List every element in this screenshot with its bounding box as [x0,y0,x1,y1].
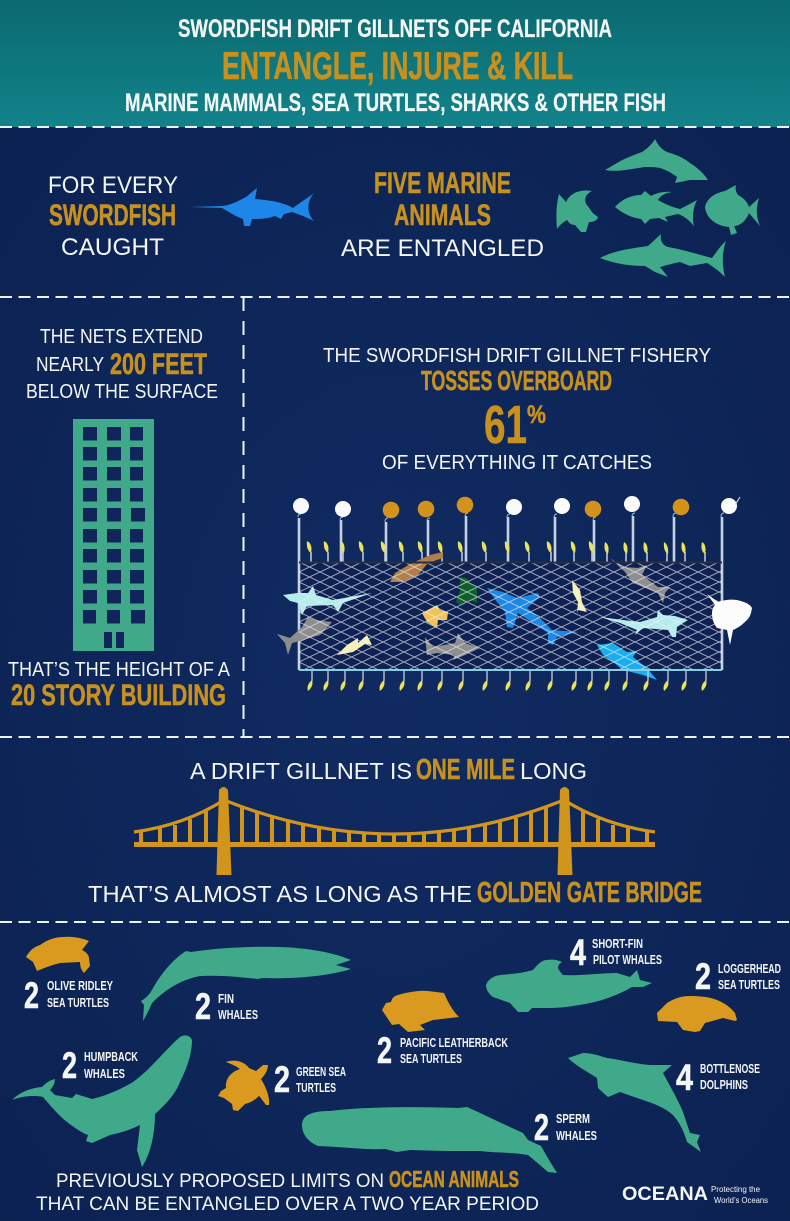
text: tosses overboard 61 percent: OF EVERYTHING IT CATCHES [382,452,652,474]
text: nets extend nearly 200 feet [26,326,218,403]
text: nets extend nearly 200 feet: THE NETS EXTEND [40,326,203,348]
float flag line [735,497,740,505]
fish: pale vertical tuna [572,580,587,613]
animal: humpback whales: HUMPBACK [84,1050,138,1064]
text: height of a 20 story building: THAT’S THE HEIGHT OF A [8,659,231,681]
text: footer caption: PREVIOUSLY PROPOSED LIMITS ON [56,1171,384,1192]
icon: dolphin [605,139,708,183]
text: footer caption: OCEAN ANIMALS [389,1166,519,1192]
net fish [277,552,688,680]
icon: golden gate bridge [134,787,655,875]
animal: green sea turtles: TURTLES [296,1081,336,1095]
bridge deck [134,842,655,847]
text: golden gate bridge comparison [88,877,702,909]
top sticks [311,552,705,562]
text: one mile long: A DRIFT GILLNET IS [190,758,412,784]
icon: turtle [556,190,598,232]
text: nets extend nearly 200 feet: 200 FEET [110,348,207,381]
header title [125,15,666,117]
animal: fin whales: 2 [195,986,211,1027]
text: for every swordfish caught [48,172,178,261]
animal: short-fin pilot whales: SHORT-FIN [592,937,643,951]
icon: sunfish [705,185,760,235]
text: height of a 20 story building: 20 STORY BUILDING [11,679,226,712]
bridge hangers [141,808,647,843]
fish: green turtle [456,577,477,605]
animal: bottlenose dolphins: BOTTLENOSE [700,1062,760,1076]
animal: sperm whales: 2 [534,1107,549,1148]
animal: short-fin pilot whales [486,932,662,1012]
fish: blue shark [487,588,578,645]
animal: olive ridley sea turtles: SEA TURTLES [47,996,109,1010]
animal: loggerhead sea turtles: 2 [695,956,711,997]
bridge towers [216,787,572,875]
text: five marine animals are entangled: ARE ENTANGLED [341,235,544,262]
logo: oceana: Protecting the [711,1185,761,1194]
fish: bright blue shark [597,643,657,680]
bottom sticks [312,671,706,681]
fish: pale tuna [337,635,372,655]
animal: fin whales: FIN [218,992,234,1006]
text: for every swordfish caught: FOR EVERY [48,172,178,199]
bridge cables [134,800,655,834]
fish: aqua shark left [283,586,372,615]
animal: bottlenose dolphins: 4 [676,1057,693,1098]
fish: gray shark right [610,558,670,603]
logo: oceana: OCEANA [622,1184,708,1205]
icons: five marine animals [556,139,760,277]
text: height of a 20 story building [8,659,231,712]
text: tosses overboard 61 percent: TOSSES OVERBOARD [421,365,612,396]
fish: white sunfish [707,594,752,645]
animal: pacific leatherback sea turtles: 2 [377,1030,392,1071]
animal: pacific leatherback sea turtles: SEA TURTLES [400,1052,462,1066]
text: one mile long [190,754,587,786]
floats orange [383,497,689,518]
net bottom line [299,669,722,671]
text: tosses overboard 61 percent: % [527,401,546,429]
animal: green sea turtles: 2 [274,1059,290,1100]
animal: sperm whales: SPERM [556,1112,590,1126]
animal: short-fin pilot whales: PILOT WHALES [593,953,662,967]
animal: short-fin pilot whales: 4 [570,932,586,973]
animal: fin whales [141,947,351,1027]
animal: bottlenose dolphins [568,1053,760,1152]
gillnet illustration [277,496,752,691]
animal: humpback whales: WHALES [84,1067,125,1081]
text: for every swordfish caught: CAUGHT [61,234,164,261]
icon: swordfish [190,188,314,226]
animal: green sea turtles [218,1059,346,1111]
fish: brown ray [390,552,443,582]
floats white [293,496,737,517]
text: five marine animals are entangled [341,167,544,262]
fish: yellow fish [422,605,448,628]
animal: pacific leatherback sea turtles: PACIFIC LEATHERBACK [400,1036,508,1050]
net mesh [299,563,722,670]
fish: gray shark left [277,617,332,655]
icon: 20 story building [73,419,154,651]
text: five marine animals are entangled: FIVE MARINE [374,167,511,200]
animal: olive ridley sea turtles: 2 [24,975,39,1016]
text: five marine animals are entangled: ANIMALS [394,199,491,232]
header title: ENTANGLE, INJURE & KILL [222,45,573,88]
logo: oceana [622,1184,768,1205]
text: one mile long: LONG [520,758,587,784]
logo: oceana: World’s Oceans [714,1196,768,1205]
fish: aqua shark right [600,610,688,637]
animal: humpback whales [12,1035,192,1167]
text: nets extend nearly 200 feet: NEARLY [36,354,104,376]
net poles [299,516,722,670]
top yellow flags [307,541,706,554]
net background [299,562,722,670]
text: footer caption: THAT CAN BE ENTANGLED OVER A TWO YEAR PERIOD [36,1194,539,1215]
icon: tuna [615,191,697,226]
animal: sperm whales [302,1107,597,1173]
text: tosses overboard 61 percent: 61 [484,395,527,455]
text: tosses overboard 61 percent [323,345,711,474]
bottom yellow weights [308,680,706,691]
header title: SWORDFISH DRIFT GILLNETS OFF CALIFORNIA [178,15,612,43]
animal: humpback whales: 2 [62,1045,77,1086]
animal: pacific leatherback sea turtles [377,991,508,1071]
animal: olive ridley sea turtles [24,937,113,1016]
text: golden gate bridge comparison: THAT’S ALMOST AS LONG AS THE [88,881,472,907]
animal: loggerhead sea turtles [657,956,781,1032]
pole hooks [298,513,724,522]
animal: fin whales: WHALES [218,1008,258,1022]
fish: gray shark center [425,633,480,660]
text: footer caption [36,1166,539,1215]
text: for every swordfish caught: SWORDFISH [49,199,176,232]
animal: sperm whales: WHALES [556,1129,597,1143]
animal: bottlenose dolphins: DOLPHINS [700,1078,748,1092]
animal: olive ridley sea turtles: OLIVE RIDLEY [47,979,113,993]
animal: green sea turtles: GREEN SEA [296,1065,346,1079]
text: tosses overboard 61 percent: THE SWORDFISH DRIFT GILLNET FISHERY [323,345,711,367]
text: nets extend nearly 200 feet: BELOW THE SURFACE [26,381,218,403]
net top line [299,562,722,564]
text: one mile long: ONE MILE [416,754,515,786]
icon: shark [600,234,726,277]
